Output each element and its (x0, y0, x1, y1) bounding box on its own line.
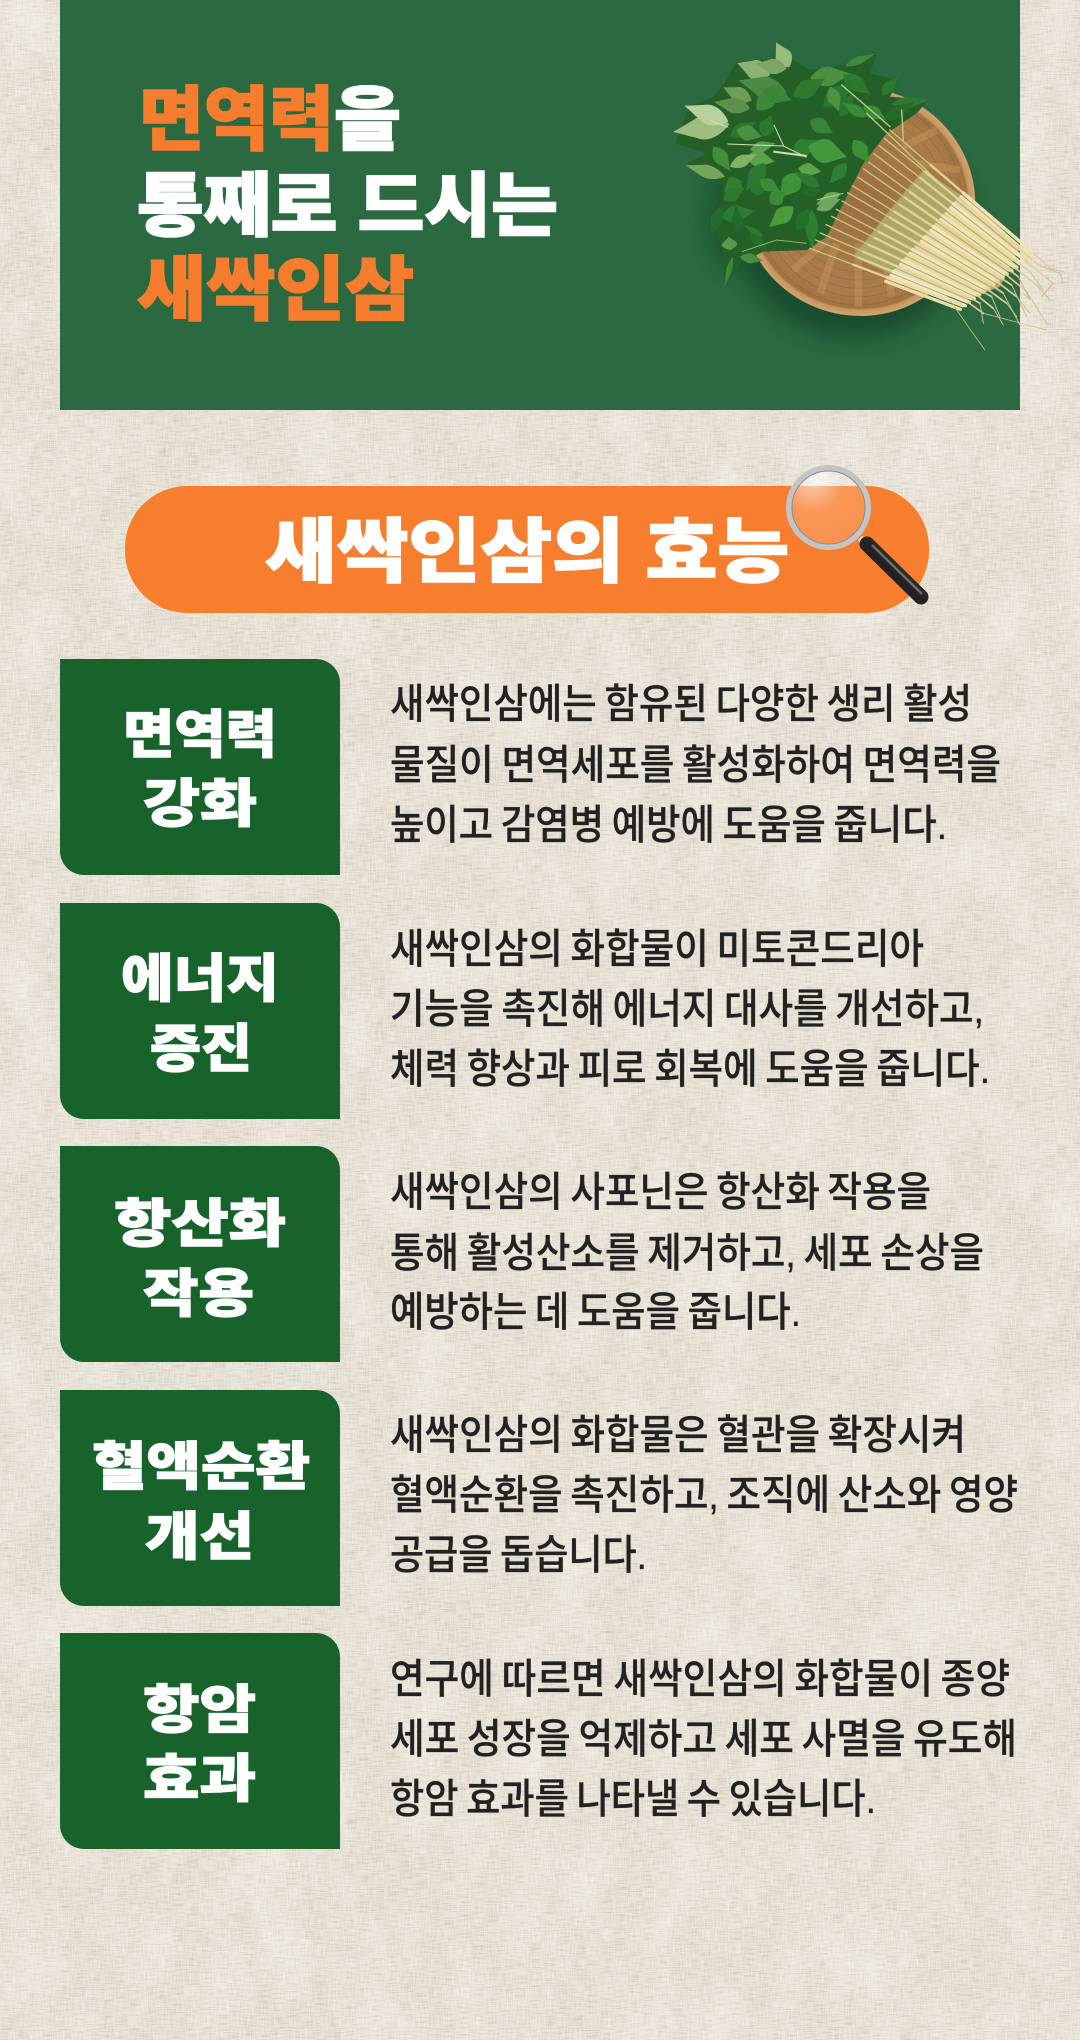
leaf mass (672, 38, 930, 288)
description: 연구에 따르면 새싹인삼의 화합물이 종양 (390, 1656, 1010, 1702)
row: 항산화 작용 (60, 1146, 984, 1362)
description: 새싹인삼의 화합물이 미토콘드리아 (390, 926, 924, 972)
label box (60, 1633, 340, 1849)
label box: 강화 (143, 776, 257, 834)
label box: 혈액순환 (92, 1439, 310, 1497)
description: 예방하는 데 도움을 줍니다. (390, 1289, 801, 1335)
label box: 에너지 (121, 951, 279, 1009)
title: 면역력을 통째로 드시는 새싹인삼: 통째로 드시는 (137, 167, 558, 245)
label box: 면역력 (123, 707, 277, 765)
description: 통해 활성산소를 제거하고, 세포 손상을 (390, 1230, 984, 1276)
panel: hero header (60, 0, 1063, 410)
label box (60, 659, 340, 875)
icon: magnifying glass (789, 468, 922, 597)
description: 기능을 촉진해 에너지 대사를 개선하고, (390, 986, 984, 1032)
label box: 증진 (150, 1021, 252, 1079)
description: 체력 향상과 피로 회복에 도움을 줍니다. (390, 1046, 990, 1092)
label box: 효과 (143, 1751, 256, 1809)
label box (60, 1146, 340, 1362)
description (390, 1656, 1017, 1822)
label box (60, 903, 340, 1119)
description (390, 1169, 984, 1335)
row: 항암 효과 (60, 1633, 1017, 1849)
row: 면역력 강화 (60, 659, 1001, 875)
row: 혈액순환 개선 (60, 1390, 1018, 1606)
roots (810, 85, 1063, 350)
description: 새싹인삼에는 함유된 다양한 생리 활성 (390, 681, 972, 727)
description: 항암 효과를 나타낼 수 있습니다. (390, 1776, 876, 1822)
title: 면역력을 통째로 드시는 새싹인삼: 을 (334, 81, 401, 159)
description: 높이고 감염병 예방에 도움을 줍니다. (390, 802, 947, 848)
title: 면역력을 통째로 드시는 새싹인삼 (137, 81, 558, 329)
description: 혈액순환을 촉진하고, 조직에 산소와 영양 (390, 1472, 1018, 1518)
label box: 항암 (143, 1682, 256, 1740)
heading pill: 새싹인삼의 효능: 새싹인삼의 효능 (265, 513, 789, 591)
label box: 개선 (145, 1509, 254, 1567)
description (390, 1412, 1018, 1578)
description: 새싹인삼의 사포닌은 항산화 작용을 (390, 1169, 931, 1215)
description: 공급을 돕습니다. (390, 1532, 647, 1578)
description (390, 926, 990, 1092)
label box: 항산화 (114, 1196, 286, 1254)
row: 에너지 증진 (60, 903, 990, 1119)
label box (60, 1390, 340, 1606)
heading pill: 새싹인삼의 효능 (125, 468, 929, 613)
description: 세포 성장을 억제하고 세포 사멸을 유도해 (390, 1716, 1017, 1762)
title: 면역력을 통째로 드시는 새싹인삼: 면역력 (139, 81, 334, 159)
label box: 작용 (143, 1266, 254, 1324)
illustration: ginseng sprouts on a bamboo basket (672, 38, 1063, 350)
description: 새싹인삼의 화합물은 혈관을 확장시켜 (390, 1412, 966, 1458)
description (390, 681, 1001, 848)
description: 물질이 면역세포를 활성화하여 면역력을 (390, 742, 1001, 788)
title: 면역력을 통째로 드시는 새싹인삼: 새싹인삼 (137, 251, 414, 329)
